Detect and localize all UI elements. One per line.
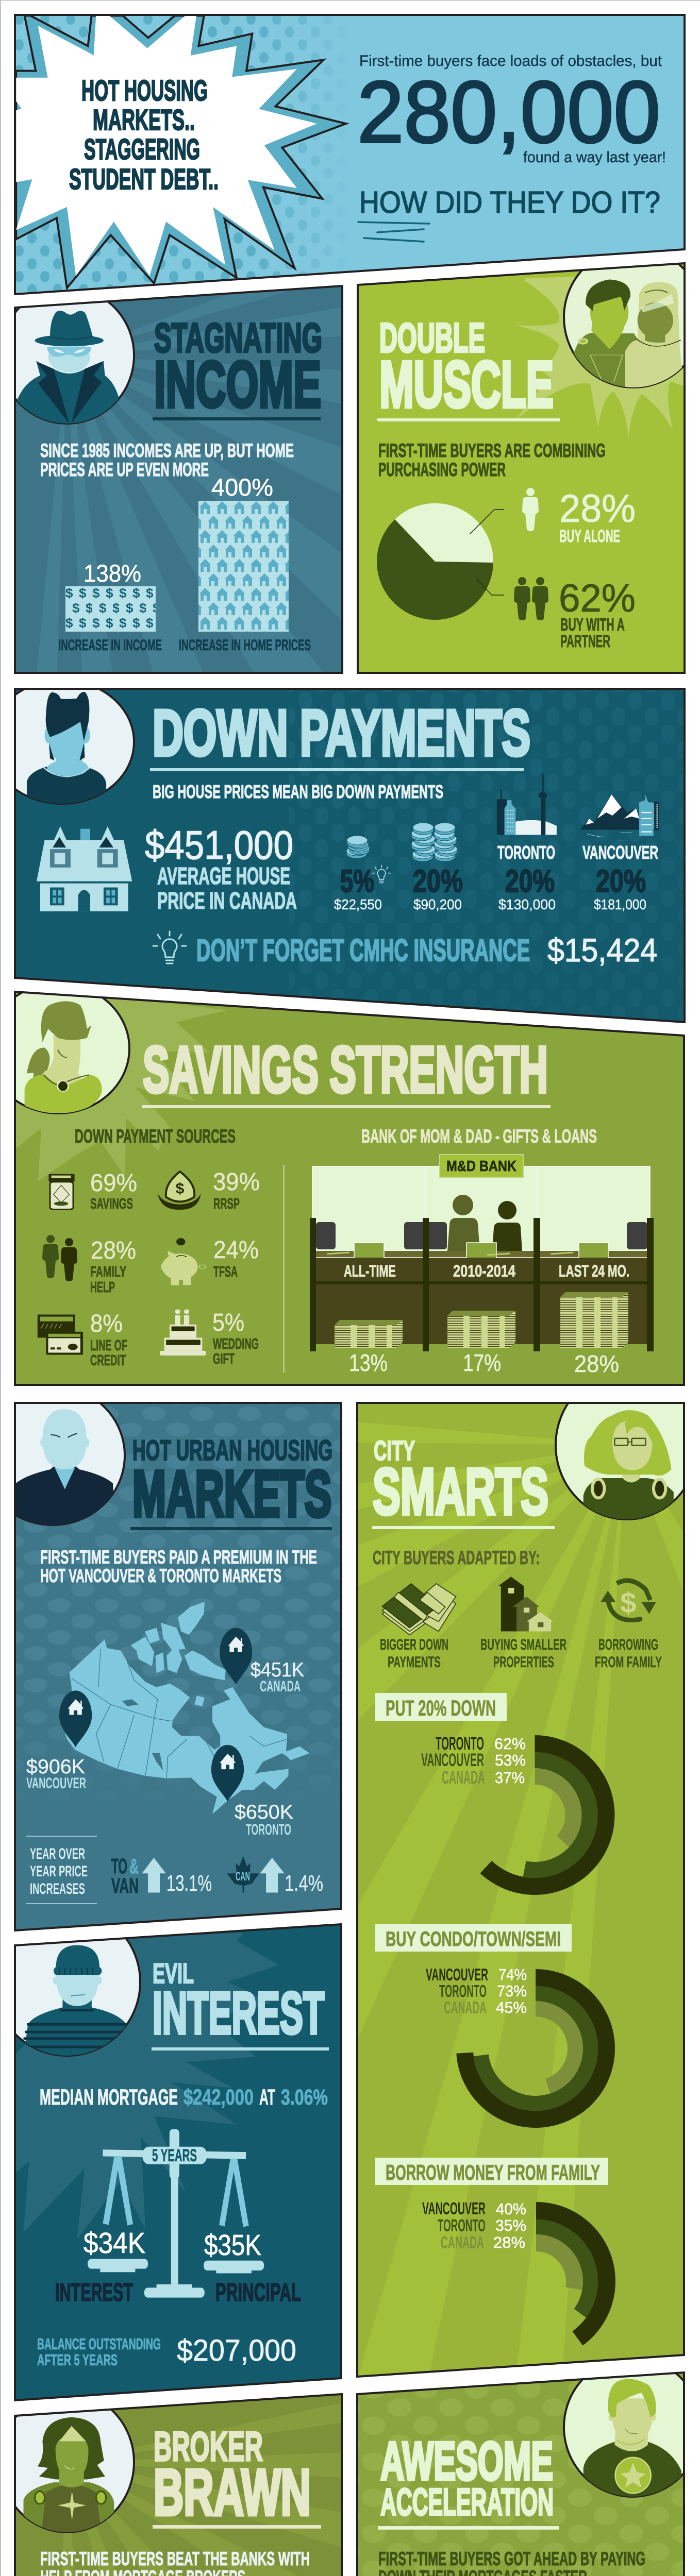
increase: canada — [227, 1856, 323, 1896]
price label: vancouver: $906K — [26, 1756, 85, 1778]
price label: canada — [251, 1659, 304, 1695]
heading — [378, 2431, 559, 2530]
radial chart: buy condo/town/semi: 73% — [497, 1982, 527, 2000]
heading: CITY — [374, 1435, 415, 1466]
period labels: LAST 24 MO. — [559, 1262, 629, 1280]
radial chart: put 20% down: 53% — [495, 1751, 526, 1769]
starburst headline: MARKETS.. — [93, 104, 195, 137]
adaptation labels: BIGGER DOWN — [380, 1636, 448, 1653]
icon: piggy bank — [161, 1238, 205, 1285]
price label: toronto: $650K — [235, 1801, 293, 1823]
subheading: FIRST-TIME BUYERS BEAT THE BANKS WITH — [40, 2548, 310, 2569]
period labels — [344, 1262, 629, 1280]
down payment percentages: 20% — [413, 863, 463, 899]
increase: toronto and vancouver: & — [129, 1854, 139, 1878]
stat: line of credit: LINE OF — [90, 1337, 127, 1354]
heading: AWESOME — [380, 2431, 553, 2492]
bar chart: income vs home prices: 400% — [211, 473, 273, 501]
subheading: FIRST-TIME BUYERS PAID A PREMIUM IN THE — [40, 1547, 317, 1568]
radial chart: borrow money from family: 40% — [496, 2200, 526, 2218]
stat: buy with a partner: 62% — [559, 577, 636, 620]
down payment amounts: $181,000 — [594, 896, 646, 912]
stat: rrsp: 39% — [213, 1168, 260, 1196]
speed lines — [358, 222, 429, 242]
icon: shrinking houses — [498, 1577, 553, 1631]
panel: down payments — [0, 680, 686, 1024]
year over year label — [26, 1836, 97, 1904]
icon: borrowing cycle: $ — [620, 1586, 637, 1619]
radial chart: buy condo/town/semi — [426, 1965, 615, 2128]
label: put 20% down — [375, 1693, 507, 1721]
radial chart: put 20% down: TORONTO — [436, 1734, 484, 1754]
period labels: 2010-2014 — [453, 1262, 515, 1280]
label: borrow money from family — [375, 2158, 608, 2185]
subheading — [40, 440, 294, 480]
radial chart: borrow money from family: CANADA — [441, 2233, 484, 2252]
down payment percentages: 20% — [505, 863, 555, 899]
avatar: burglar — [0, 1908, 140, 2057]
average house price — [145, 822, 297, 914]
icon: small bulb — [372, 865, 391, 883]
icon: large coin stacks — [411, 823, 457, 861]
increase: canada: CAN — [236, 1870, 250, 1884]
stack percentages — [349, 1349, 619, 1377]
heading: MUSCLE — [379, 348, 554, 421]
radial chart: buy condo/town/semi: VANCOUVER — [426, 1965, 488, 1984]
avatar: masked villain — [16, 302, 135, 425]
radial chart: borrow money from family: VANCOUVER — [422, 2199, 486, 2218]
bar chart: income vs home prices: 138% — [84, 560, 141, 587]
heading: MARKETS — [132, 1458, 331, 1530]
price label: toronto — [235, 1801, 293, 1838]
avatar: superheroine — [0, 2392, 134, 2534]
icon: small coin stack — [346, 836, 370, 858]
radial chart: put 20% down: 62% — [494, 1735, 526, 1753]
heading — [377, 315, 560, 421]
icon: wedding cake — [160, 1309, 206, 1355]
money stack: 17% — [447, 1311, 515, 1348]
panel: city smarts — [357, 1371, 698, 2380]
balance outstanding: $207,000 — [177, 2334, 296, 2367]
city labels: VANCOUVER — [582, 842, 658, 863]
year over year label: INCREASES — [30, 1880, 85, 1897]
starburst headline: HOT HOUSING — [81, 74, 208, 107]
starburst headline: STAGGERING — [84, 133, 200, 166]
avatar: bald villain — [16, 1404, 126, 1526]
panel: evil interest — [0, 1908, 341, 2400]
icon: balance scale — [88, 2129, 264, 2298]
avatar: woman with ponytail — [16, 993, 130, 1114]
down payment percentages — [340, 863, 646, 899]
stat: wedding gift — [212, 1309, 259, 1367]
price label: toronto: TORONTO — [246, 1821, 291, 1838]
icon: savings jar — [48, 1174, 75, 1209]
subheading: PRICES ARE UP EVEN MORE — [40, 459, 209, 480]
subheading — [40, 1547, 317, 1586]
price label: canada: $451K — [251, 1659, 304, 1681]
median mortgage line: MEDIAN MORTGAGE — [40, 2085, 178, 2110]
increase: toronto and vancouver — [111, 1854, 212, 1897]
icon: bulb — [153, 931, 186, 963]
heading: STAGNATING — [154, 315, 322, 361]
average house price: PRICE IN CANADA — [157, 887, 297, 914]
radial chart: borrow money from family: 35% — [495, 2216, 526, 2234]
subheading: SINCE 1985 INCOMES ARE UP, BUT HOME — [40, 440, 294, 461]
heading — [152, 1957, 329, 2050]
comic starburst — [16, 15, 346, 288]
increase: toronto and vancouver: 13.1% — [166, 1871, 212, 1896]
column headings: DOWN PAYMENT SOURCES — [75, 1126, 236, 1147]
stat: line of credit — [90, 1310, 127, 1369]
heading — [372, 1435, 555, 1529]
heading: INCOME — [154, 348, 321, 421]
interest versus principal: PRINCIPAL — [215, 2279, 301, 2307]
stat: tfsa: TFSA — [213, 1264, 238, 1280]
map of canada — [65, 1602, 310, 1814]
balance outstanding: BALANCE OUTSTANDING — [37, 2335, 161, 2353]
radial chart: borrow money from family — [422, 2199, 615, 2346]
pie chart — [377, 503, 504, 620]
stack percentages: 13% — [349, 1349, 388, 1376]
sign: m&d bank — [440, 1155, 523, 1177]
label: put 20% down: PUT 20% DOWN — [386, 1696, 496, 1721]
icon: vancouver skyline — [580, 794, 659, 840]
price label: vancouver: VANCOUVER — [26, 1775, 86, 1792]
price label: vancouver — [26, 1756, 86, 1792]
stat: line of credit: CREDIT — [90, 1352, 126, 1369]
interest versus principal: $35K — [204, 2229, 261, 2262]
balance outstanding: AFTER 5 YEARS — [37, 2351, 118, 2369]
heading: ACCELERATION — [380, 2481, 554, 2523]
radial chart: put 20% down: VANCOUVER — [421, 1750, 484, 1770]
radial chart: buy condo/town/semi: CANADA — [444, 1998, 487, 2017]
bar chart: income vs home prices: INCREASE IN HOME PRICES — [179, 637, 311, 654]
radial chart: buy condo/town/semi: 45% — [496, 1998, 527, 2016]
burst background — [15, 1933, 278, 2239]
sign: m&d bank: M&D BANK — [446, 1158, 516, 1175]
stat: savings — [90, 1170, 137, 1212]
icon: borrowing cycle — [601, 1581, 656, 1620]
icon: credit cards — [38, 1315, 83, 1355]
down payment percentages: 20% — [596, 863, 646, 899]
price label: canada: CANADA — [260, 1678, 301, 1695]
icon: family help — [42, 1235, 77, 1281]
heading: BRAWN — [154, 2456, 311, 2529]
stat: tfsa: 24% — [213, 1236, 259, 1264]
heading — [150, 697, 530, 771]
down payment amounts: $22,550 — [334, 896, 382, 912]
panel: hot urban housing markets — [0, 1386, 345, 1934]
radial chart: buy condo/town/semi: TORONTO — [439, 1981, 487, 2001]
starburst headline — [69, 74, 219, 196]
increase: toronto and vancouver: VAN — [111, 1874, 139, 1897]
increase: canada: 1.4% — [285, 1871, 323, 1896]
stat: tfsa — [213, 1236, 259, 1280]
year over year label: YEAR PRICE — [30, 1863, 88, 1880]
average house price: $451,000 — [145, 822, 293, 868]
stat: wedding gift: WEDDING — [213, 1336, 259, 1352]
year over year label: YEAR OVER — [30, 1845, 85, 1862]
stat: buy with a partner — [514, 577, 636, 651]
bar chart: income vs home prices — [58, 473, 311, 654]
subheading: BIG HOUSE PRICES MEAN BIG DOWN PAYMENTS — [153, 781, 443, 802]
heading — [153, 2424, 321, 2529]
average house price: AVERAGE HOUSE — [157, 862, 290, 889]
adaptation labels — [380, 1636, 662, 1671]
stat: wedding gift: GIFT — [213, 1351, 235, 1367]
subheading — [378, 2548, 645, 2576]
adaptation labels: PROPERTIES — [493, 1654, 554, 1671]
subheading: CITY BUYERS ADAPTED BY: — [373, 1547, 540, 1568]
burst behind avatar — [515, 273, 685, 438]
money stack: 13% — [335, 1320, 403, 1348]
cmhc insurance callout: $15,424 — [547, 933, 657, 969]
stat: savings: 69% — [90, 1170, 137, 1197]
found a way: found a way last year! — [523, 149, 666, 166]
burst behind avatar — [16, 992, 227, 1181]
panel: stagnating income — [14, 284, 343, 674]
city labels — [497, 842, 658, 863]
radial chart: put 20% down: CANADA — [442, 1768, 485, 1788]
stat: buy with a partner: BUY WITH A — [560, 615, 625, 635]
icon: house — [37, 826, 132, 911]
heading: INTEREST — [153, 1980, 324, 2046]
starburst headline: STUDENT DEBT.. — [69, 163, 219, 196]
icon: money bundles — [382, 1584, 456, 1635]
down payment percentages: 5% — [340, 863, 374, 899]
stack percentages: 28% — [574, 1350, 619, 1377]
icon: balance scale: 5 YEARS — [152, 2146, 197, 2165]
heading — [153, 315, 322, 421]
down payment amounts: $130,000 — [498, 896, 556, 912]
stat: rrsp: RRSP — [213, 1196, 240, 1212]
avatar: dark haired woman — [16, 690, 135, 805]
increase: toronto and vancouver: TO — [111, 1854, 127, 1878]
stat: wedding gift: 5% — [212, 1309, 244, 1336]
stat: buy with a partner: PARTNER — [560, 632, 610, 651]
stat: family help — [90, 1237, 136, 1296]
panel: awesome acceleration — [357, 2358, 700, 2576]
icon: toronto skyline — [497, 774, 557, 835]
panel: broker brawn — [0, 2392, 351, 2576]
interest versus principal — [55, 2227, 301, 2307]
question: HOW DID THEY DO IT? — [359, 185, 660, 219]
intro line: First-time buyers face loads of obstacles, but — [359, 53, 662, 70]
panel: savings strength — [0, 984, 684, 1385]
interest versus principal: INTEREST — [55, 2279, 133, 2307]
heading: BROKER — [154, 2424, 263, 2469]
stat: family help: 28% — [91, 1237, 136, 1264]
avatar: couple — [563, 265, 684, 388]
heading: EVIL — [153, 1957, 194, 1989]
radial chart: put 20% down — [421, 1734, 614, 1895]
icon: nest egg — [158, 1172, 201, 1210]
map pin: vancouver — [59, 1690, 92, 1748]
subheading: PURCHASING POWER — [378, 459, 506, 480]
period labels: ALL-TIME — [344, 1262, 396, 1280]
heading: HOT URBAN HOUSING — [132, 1434, 332, 1466]
subheading: HOT VANCOUVER & TORONTO MARKETS — [40, 1565, 281, 1586]
stack percentages: 17% — [463, 1349, 501, 1376]
heading: SMARTS — [373, 1455, 548, 1528]
stat: buy alone — [522, 487, 636, 546]
bank illustration — [310, 1155, 654, 1377]
stat: family help: FAMILY — [90, 1264, 126, 1280]
subheading — [378, 440, 606, 480]
stat: savings: SAVINGS — [90, 1196, 133, 1212]
balance outstanding — [37, 2334, 296, 2369]
stat: family help: HELP — [90, 1279, 115, 1296]
stat: buy alone: BUY ALONE — [559, 527, 620, 546]
heading — [130, 1434, 332, 1530]
adaptation labels: BUYING SMALLER — [480, 1636, 566, 1653]
stat: buy alone: 28% — [559, 487, 636, 531]
median mortgage line: $242,000 — [184, 2085, 254, 2110]
bar chart: income vs home prices: INCREASE IN INCOME — [58, 637, 162, 654]
median mortgage line: 3.06% — [281, 2085, 328, 2110]
adaptation labels: BORROWING — [598, 1636, 658, 1653]
label: buy condo/town/semi — [375, 1924, 572, 1952]
label: buy condo/town/semi: BUY CONDO/TOWN/SEMI — [386, 1928, 561, 1951]
stat: line of credit: 8% — [90, 1310, 123, 1337]
radial chart: buy condo/town/semi: 74% — [498, 1965, 527, 1984]
median mortgage line: AT — [259, 2085, 275, 2110]
panel: hero intro — [15, 15, 685, 296]
heading: DOUBLE — [379, 315, 485, 361]
icon: nest egg: $ — [176, 1180, 185, 1197]
money stack: 28% — [560, 1292, 628, 1348]
interest versus principal: $34K — [84, 2227, 145, 2260]
map pin: canada — [220, 1628, 252, 1685]
avatar: hero in star shirt — [564, 2358, 700, 2500]
adaptation labels: PAYMENTS — [388, 1654, 441, 1671]
radial chart: borrow money from family: TORONTO — [438, 2216, 486, 2235]
stat: rrsp — [213, 1168, 260, 1212]
down payment amounts — [334, 896, 646, 912]
down payment amounts: $90,200 — [413, 896, 462, 912]
city labels: TORONTO — [497, 842, 555, 863]
big number: 280,000 — [357, 63, 660, 161]
adaptation labels: FROM FAMILY — [595, 1654, 662, 1671]
avatar: curly haired woman — [555, 1404, 683, 1520]
panel: double muscle — [358, 247, 700, 673]
radial chart: put 20% down: 37% — [495, 1769, 525, 1787]
subheading — [40, 2548, 310, 2576]
radial chart: borrow money from family: 28% — [493, 2233, 525, 2251]
map pin: toronto — [211, 1745, 244, 1802]
